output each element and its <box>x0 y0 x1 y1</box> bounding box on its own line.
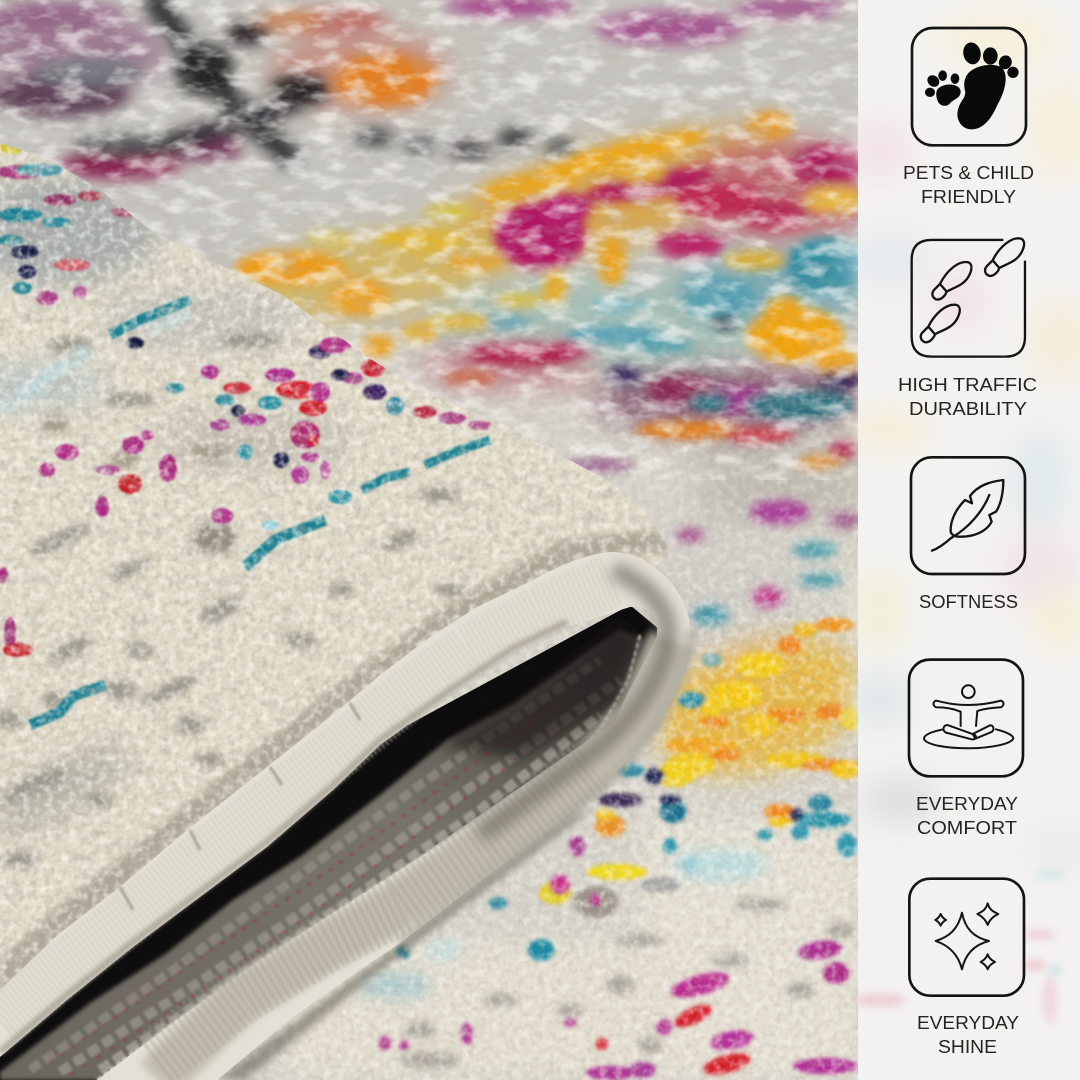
shadow under the lower band <box>217 810 590 1080</box>
band shading <box>0 622 567 1052</box>
text: high traffic durability: DURABILITY <box>909 399 1027 419</box>
text: everyday comfort <box>916 794 1018 838</box>
text: pets and child friendly: FRIENDLY <box>921 187 1016 207</box>
icon: high traffic footprints <box>912 238 1025 357</box>
text: high traffic durability: HIGH TRAFFIC <box>898 375 1037 395</box>
shaded lower edge of pile <box>0 530 672 993</box>
text: pets and child friendly <box>903 163 1034 207</box>
text: pets and child friendly: PETS & CHILD <box>903 163 1034 183</box>
text: everyday shine: EVERYDAY <box>917 1013 1019 1033</box>
rug underside backing <box>0 605 660 1080</box>
text: softness: SOFTNESS <box>919 592 1018 612</box>
text: everyday comfort: EVERYDAY <box>916 794 1018 814</box>
text: everyday comfort: COMFORT <box>917 818 1017 838</box>
out-of-focus fibre blotches <box>0 0 858 480</box>
rolled rug pile <box>0 140 700 1000</box>
icon: everyday comfort meditating figure <box>909 660 1023 776</box>
band notches <box>120 703 360 910</box>
sidebar panel background <box>850 0 1080 1080</box>
lower band tone <box>157 640 672 1080</box>
band rope texture <box>0 580 613 1022</box>
rug binding edge <box>0 552 690 1080</box>
icon: everyday shine sparkles <box>909 879 1024 996</box>
text: high traffic durability <box>898 375 1037 419</box>
text: everyday shine <box>917 1013 1019 1057</box>
text: everyday shine: SHINE <box>938 1037 997 1057</box>
icon: softness feather <box>911 457 1025 574</box>
icon: pets and child footprints <box>912 28 1026 145</box>
